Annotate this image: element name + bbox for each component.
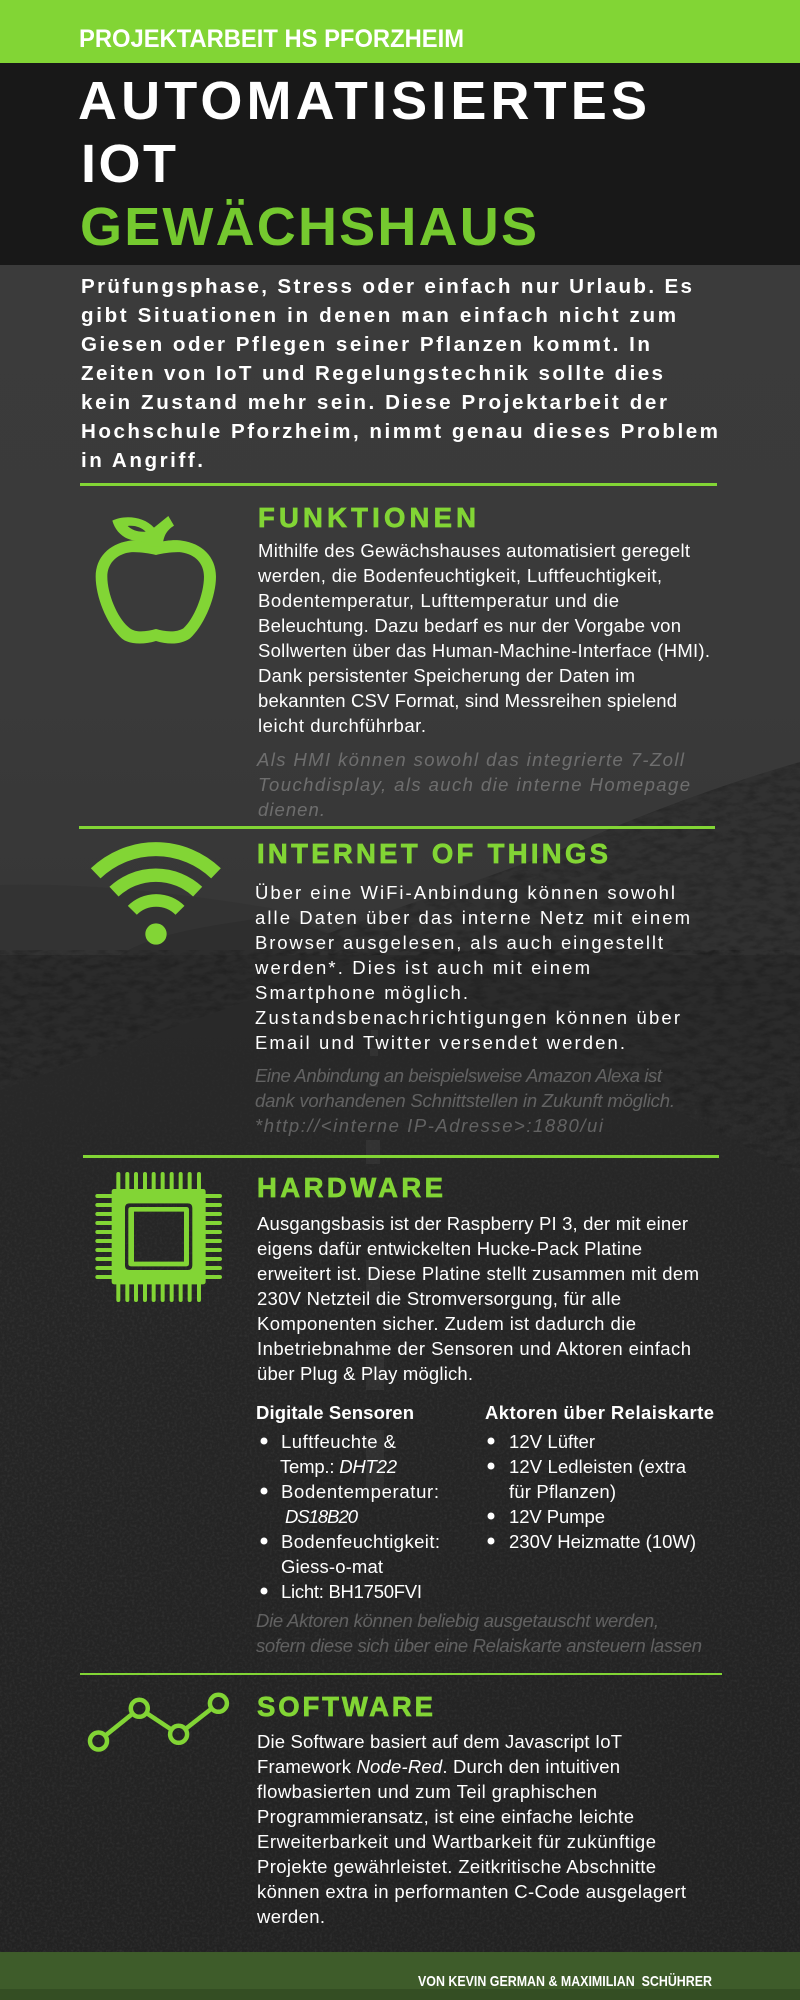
body text: Hardware: Inbetriebnahme der Sensoren und Aktoren einfach	[257, 1338, 691, 1359]
background: landscape photo	[0, 265, 800, 1490]
body text: Funktionen: Dank persistenter Speicherung der Daten im	[258, 665, 635, 686]
footer credit: VON KEVIN GERMAN & MAXIMILIAN SCHÜHRER	[418, 1973, 712, 1990]
title line 1: AUTOMATISIERTES	[78, 71, 647, 131]
body text: Funktionen	[257, 540, 710, 736]
intro paragraph	[81, 275, 718, 472]
top bar	[0, 0, 800, 63]
list: Aktoren über Relaiskarte: 12V Ledleisten (extra	[509, 1456, 687, 1477]
body text: Hardware: erweitert ist. Diese Platine stellt zusammen mit dem	[257, 1263, 699, 1284]
list: Aktoren über Relaiskarte: Aktoren über Relaiskarte	[485, 1402, 714, 1423]
body text: Hardware: Komponenten sicher. Zudem ist dadurch die	[257, 1313, 636, 1334]
note: Funktionen: dienen.	[258, 799, 325, 820]
note: Internet of Things: dank vorhandenen Schnittstellen in Zukunft möglich.	[255, 1090, 675, 1111]
body text: Software: Projekte gewährleistet. Zeitkritische Abschnitte	[257, 1856, 656, 1877]
body text: Hardware: eigens dafür entwickelten Hucke-Pack Platine	[257, 1238, 642, 1259]
body text: Funktionen: bekannten CSV Format, sind Messreihen spielend	[258, 690, 677, 711]
body text: Funktionen: Beleuchtung. Dazu bedarf es nur der Vorgabe von	[258, 615, 681, 636]
panel: Hardware	[97, 1172, 714, 1656]
note: Internet of Things: Eine Anbindung an beispielsweise Amazon Alexa ist	[255, 1065, 663, 1086]
body text: Internet of Things: Zustandsbenachrichtigungen können über	[255, 1007, 680, 1028]
list: Digitale Sensoren: DS18B20	[285, 1506, 359, 1527]
list: Aktoren über Relaiskarte: 12V Lüfter	[509, 1431, 595, 1452]
title line 3 green: GEWÄCHSHAUS	[80, 197, 537, 257]
heading: Software: SOFTWARE	[257, 1691, 433, 1722]
note: Internet of Things: *http://<interne IP-Adresse>:1880/ui	[255, 1115, 604, 1136]
body text: Software: werden.	[256, 1906, 325, 1927]
list: Digitale Sensoren: Licht: BH1750FVI	[281, 1581, 422, 1602]
footer bar	[0, 1952, 800, 2000]
heading: Hardware: HARDWARE	[257, 1172, 443, 1203]
body text: Software: können extra in performanten C-Code ausgelagert	[257, 1881, 686, 1902]
body text: Hardware	[257, 1213, 699, 1384]
body text: Funktionen: Mithilfe des Gewächshauses automatisiert geregelt	[258, 540, 690, 561]
body text: Software: flowbasierten und zum Teil graphischen	[257, 1781, 597, 1802]
intro paragraph: Giesen oder Pflegen seiner Pflanzen kommt. In	[81, 333, 650, 356]
body text: Software: Die Software basiert auf dem Javascript IoT	[257, 1731, 622, 1752]
list: Aktoren über Relaiskarte: 12V Pumpe	[509, 1506, 605, 1527]
note: Funktionen: Touchdisplay, als auch die interne Homepage	[258, 774, 690, 795]
intro paragraph: gibt Situationen in denen man einfach nicht zum	[81, 304, 676, 327]
body text: Internet of Things: alle Daten über das interne Netz mit einem	[255, 907, 690, 928]
note: Funktionen	[256, 749, 690, 820]
panel: Funktionen	[96, 502, 710, 820]
list: Digitale Sensoren: Giess-o-mat	[281, 1556, 383, 1577]
note: Funktionen: Als HMI können sowohl das integrierte 7-Zoll	[256, 749, 685, 770]
body text: Funktionen: leicht durchführbar.	[258, 715, 426, 736]
heading: Funktionen: FUNKTIONEN	[258, 502, 476, 533]
body text: Internet of Things: werden*. Dies ist auch mit einem	[254, 957, 590, 978]
intro paragraph: Prüfungsphase, Stress oder einfach nur Urlaub. Es	[81, 275, 692, 298]
list: Digitale Sensoren: Luftfeuchte &	[281, 1431, 397, 1452]
icon: wifi	[96, 849, 216, 945]
intro paragraph: kein Zustand mehr sein. Diese Projektarbeit der	[81, 391, 667, 414]
note: Internet of Things	[255, 1065, 675, 1136]
top bar label: PROJEKTARBEIT HS PFORZHEIM	[79, 25, 464, 53]
list: Digitale Sensoren: Digitale Sensoren	[256, 1402, 414, 1423]
body text: Internet of Things: Smartphone möglich.	[255, 982, 468, 1003]
body text: Funktionen: werden, die Bodenfeuchtigkeit, Luftfeuchtigkeit,	[257, 565, 662, 586]
note: Hardware: sofern diese sich über eine Relaiskarte ansteuern lassen	[256, 1635, 702, 1656]
intro paragraph: Zeiten von IoT und Regelungstechnik sollte dies	[81, 362, 663, 385]
panel: Software	[90, 1691, 686, 1927]
body text: Funktionen: Sollwerten über das Human-Machine-Interface (HMI).	[258, 640, 710, 661]
list: Digitale Sensoren: Temp.: DHT22	[280, 1456, 398, 1477]
note: Hardware	[256, 1610, 702, 1656]
title line 2: IOT	[81, 134, 176, 194]
list: Digitale Sensoren: Bodentemperatur:	[281, 1481, 439, 1502]
body text: Internet of Things: Email und Twitter versendet werden.	[255, 1032, 625, 1053]
body text: Software: Programmieransatz, ist eine einfache leichte	[257, 1806, 634, 1827]
note: Hardware: Die Aktoren können beliebig ausgetauscht werden,	[256, 1610, 659, 1631]
list: Aktoren über Relaiskarte: 230V Heizmatte (10W)	[509, 1531, 696, 1552]
icon: apple	[96, 516, 216, 644]
list: Digitale Sensoren: Bodenfeuchtigkeit:	[281, 1531, 440, 1552]
body text: Internet of Things: Browser ausgelesen, als auch eingestellt	[255, 932, 663, 953]
body text: Software	[256, 1731, 686, 1927]
list: Digitale Sensoren	[256, 1402, 440, 1602]
icon: chip	[97, 1174, 220, 1300]
icon: line chart nodes	[90, 1695, 227, 1750]
intro paragraph: in Angriff.	[81, 449, 203, 472]
body text: Software: Framework Node-Red. Durch den intuitiven	[257, 1756, 620, 1777]
panel: Internet of Things	[96, 838, 690, 1136]
list: Aktoren über Relaiskarte: für Pflanzen)	[509, 1481, 616, 1502]
body text: Funktionen: Bodentemperatur, Lufttemperatur und die	[258, 590, 619, 611]
title panel	[0, 63, 800, 265]
body text: Internet of Things	[254, 882, 690, 1053]
body text: Hardware: 230V Netzteil die Stromversorgung, für alle	[257, 1288, 621, 1309]
body text: Software: Erweiterbarkeit und Wartbarkeit für zukünftige	[257, 1831, 656, 1852]
heading: Internet of Things: INTERNET OF THINGS	[257, 838, 608, 869]
body text: Hardware: über Plug & Play möglich.	[257, 1363, 473, 1384]
intro paragraph: Hochschule Pforzheim, nimmt genau dieses Problem	[81, 420, 718, 443]
list: Aktoren über Relaiskarte	[485, 1402, 714, 1552]
body text: Internet of Things: Über eine WiFi-Anbindung können sowohl	[255, 882, 675, 903]
body text: Hardware: Ausgangsbasis ist der Raspberry PI 3, der mit einer	[257, 1213, 688, 1234]
